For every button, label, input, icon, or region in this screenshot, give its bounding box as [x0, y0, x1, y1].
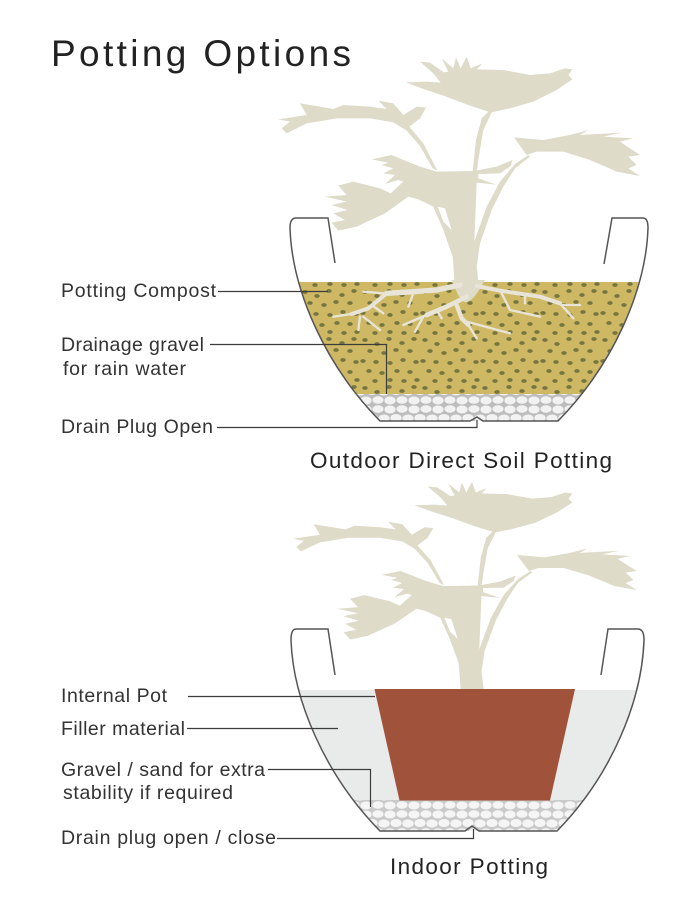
label: potting compost: Potting Compost	[61, 280, 217, 302]
soil: potting compost	[290, 282, 650, 394]
label: drainage gravel: for rain water	[63, 358, 186, 380]
leader: drainage gravel	[210, 344, 386, 394]
plant silhouette	[293, 482, 637, 692]
pot outline	[291, 629, 644, 831]
label: drain plug open: Drain Plug Open	[61, 416, 213, 438]
label: drainage gravel: Drainage gravel	[61, 334, 204, 356]
plant roots	[333, 280, 580, 338]
filler material	[290, 690, 650, 800]
label: filler material: Filler material	[61, 718, 185, 740]
panel: outdoor direct soil potting	[61, 57, 650, 473]
label: internal pot: Internal Pot	[61, 685, 168, 707]
leader: filler material	[187, 728, 338, 730]
label: drain plug open or close: Drain plug open / close	[61, 827, 276, 849]
leader: potting compost	[218, 290, 328, 292]
leader: gravel	[268, 770, 370, 807]
label: drainage gravel	[61, 334, 204, 380]
title: Potting Options	[51, 33, 351, 74]
label: gravel or sand: stability if required	[63, 782, 233, 804]
panel: indoor potting	[61, 482, 650, 879]
plant silhouette	[278, 57, 640, 288]
gravel layer	[340, 800, 590, 831]
label: gravel or sand	[61, 759, 265, 804]
caption: indoor potting: Indoor Potting	[390, 854, 548, 879]
label: gravel or sand: Gravel / sand for extra	[61, 759, 265, 781]
leader: drain plug	[217, 420, 477, 428]
gravel layer	[358, 394, 581, 421]
pot outline	[290, 218, 648, 421]
leader: drain plug	[277, 829, 474, 838]
internal pot	[374, 689, 575, 800]
leader: internal pot	[188, 696, 375, 698]
caption: outdoor potting: Outdoor Direct Soil Potting	[310, 448, 612, 473]
